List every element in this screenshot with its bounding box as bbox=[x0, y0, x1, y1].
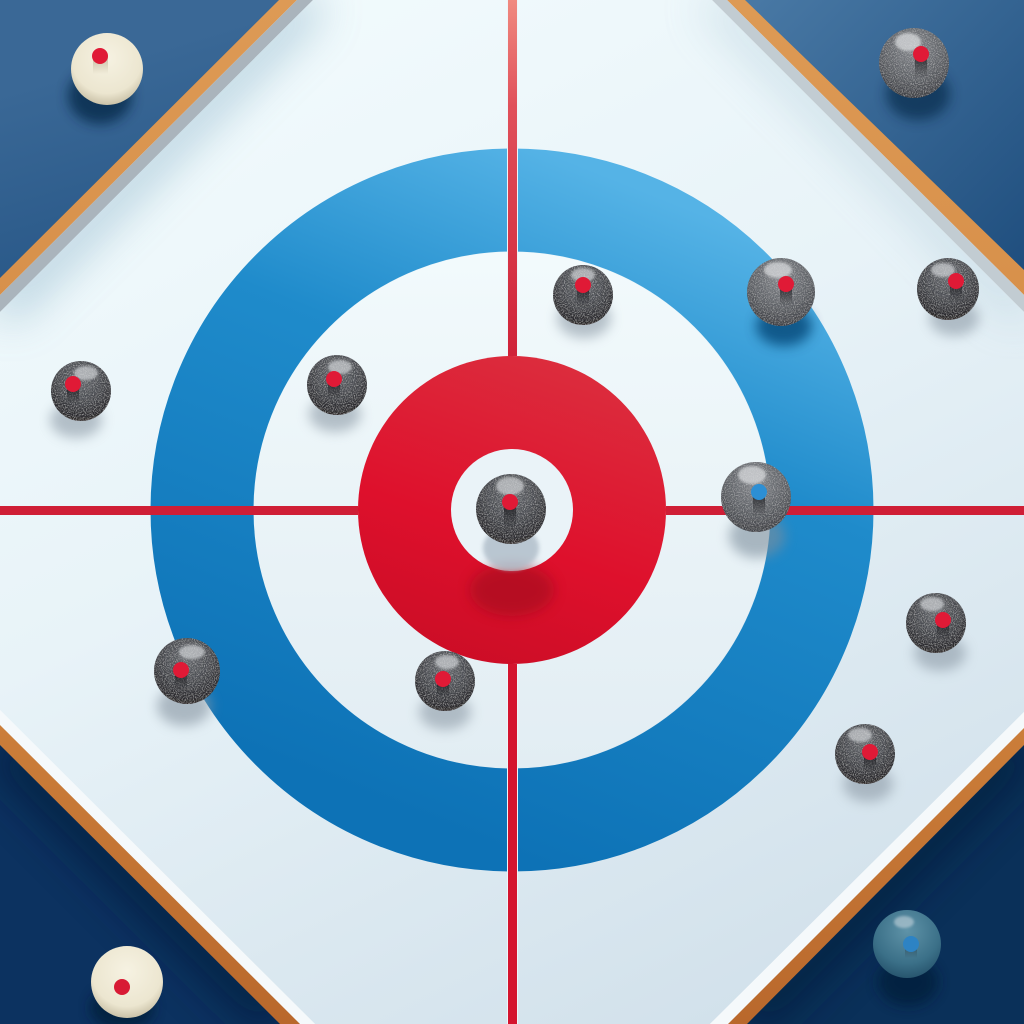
outer blue ring bbox=[202, 200, 822, 820]
stone: near lower right edge bbox=[835, 724, 895, 802]
stone: center on button bbox=[476, 474, 546, 570]
red ring bbox=[358, 356, 666, 664]
stone: cream bottom left bbox=[90, 946, 163, 1024]
stone: far right upper bbox=[917, 258, 979, 336]
white ring bbox=[254, 252, 770, 768]
stone: teal bottom right bbox=[873, 910, 941, 1006]
stone: left inside white ring bbox=[307, 355, 367, 432]
stone: upper centre bbox=[553, 265, 613, 338]
stone: lower centre bbox=[415, 651, 475, 730]
stone: blue pin on tee line bbox=[721, 462, 791, 558]
house rings bbox=[202, 200, 822, 820]
stone: cream top left bbox=[68, 33, 143, 124]
button bbox=[451, 449, 573, 571]
stone: grey top right bbox=[879, 28, 950, 120]
stone: lower left on blue ring bbox=[154, 638, 220, 726]
stone: far left bbox=[50, 361, 111, 438]
shadow on red ring bbox=[470, 564, 554, 616]
stone: right lower bbox=[906, 593, 966, 671]
stone: upper right on blue ring bbox=[747, 258, 815, 346]
